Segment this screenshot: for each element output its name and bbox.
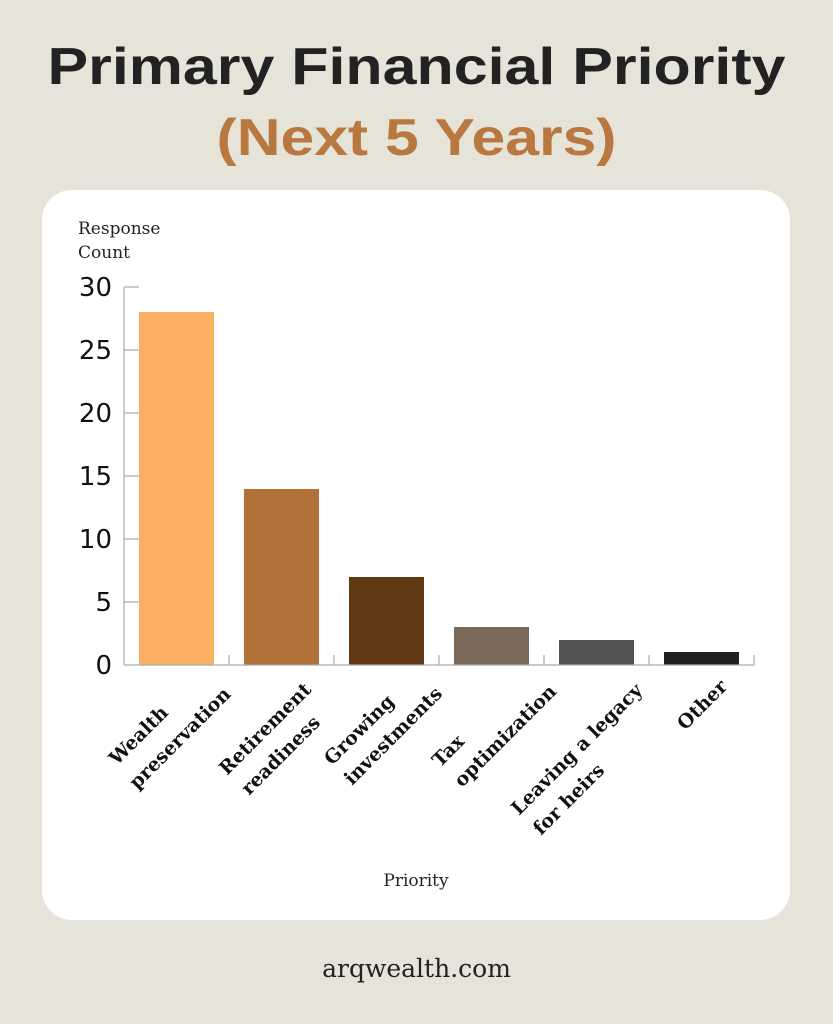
x-axis title: Priority bbox=[383, 871, 449, 891]
y-axis: 10 bbox=[79, 525, 112, 555]
x-axis category labels bbox=[104, 675, 733, 840]
footer: website: arqwealth.com bbox=[322, 954, 511, 983]
x-axis category labels: Tax bbox=[428, 730, 469, 772]
x-axis category labels: investments bbox=[340, 683, 447, 790]
x-axis category labels: Other bbox=[673, 675, 733, 735]
x-axis category labels: preservation bbox=[125, 683, 235, 794]
y-axis: 15 bbox=[79, 462, 112, 492]
y-axis: 20 bbox=[79, 399, 112, 429]
panel: chart card bbox=[42, 190, 790, 920]
y-axis: 0 bbox=[95, 651, 112, 681]
x-axis category labels: Retirement bbox=[215, 678, 316, 780]
x-axis category labels: readiness bbox=[237, 712, 325, 800]
y-axis title: Count bbox=[78, 243, 130, 263]
x-axis category labels: Growing bbox=[320, 691, 399, 770]
y-axis title bbox=[78, 219, 160, 263]
x-axis category labels: Wealth bbox=[104, 702, 173, 770]
y-axis: 30 bbox=[79, 273, 112, 303]
y-axis: 25 bbox=[79, 336, 112, 366]
title: Primary Financial Priority bbox=[48, 38, 786, 96]
title: (Next 5 Years) bbox=[216, 109, 616, 167]
x-axis category labels: Leaving a legacy bbox=[507, 679, 648, 820]
y-axis: 5 bbox=[95, 588, 112, 618]
y-axis title: Response bbox=[78, 219, 160, 239]
x-axis bbox=[124, 655, 754, 665]
x-axis category labels: for heirs bbox=[529, 759, 609, 840]
y-axis bbox=[79, 273, 139, 681]
title bbox=[48, 38, 786, 167]
bar chart bbox=[139, 312, 739, 665]
x-axis category labels: optimization bbox=[450, 680, 561, 792]
